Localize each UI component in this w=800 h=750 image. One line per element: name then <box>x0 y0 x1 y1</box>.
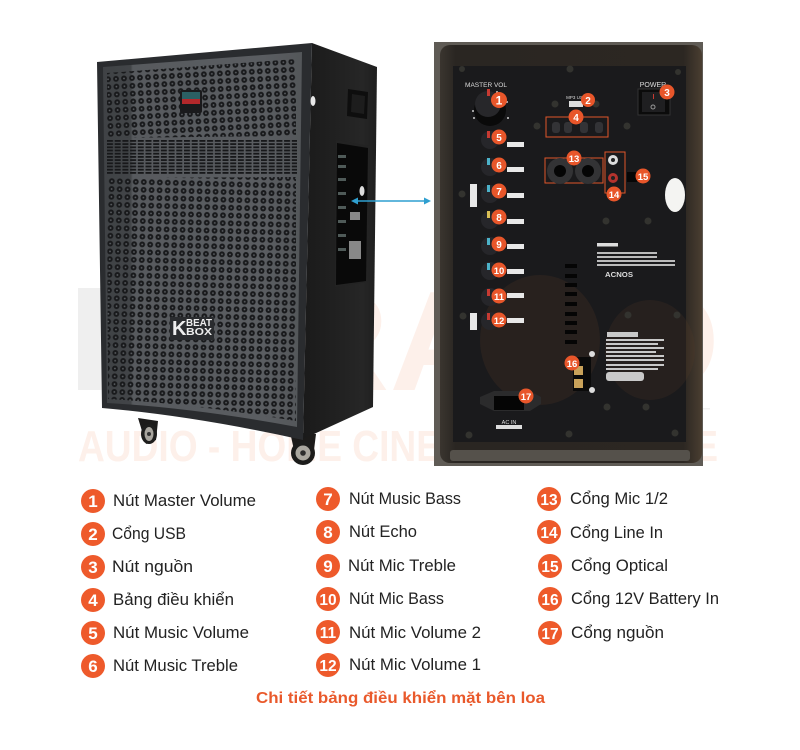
photo number markers: 17 <box>521 392 531 403</box>
side control panel <box>335 140 370 287</box>
model text <box>597 243 675 279</box>
item 17: 17 <box>541 626 559 643</box>
photo number markers: 4 <box>573 113 579 124</box>
vent slots <box>565 264 577 344</box>
power switch <box>638 82 670 115</box>
item 1: Nút Master Volume <box>113 491 256 510</box>
item 12: Nút Mic Volume 1 <box>349 655 481 674</box>
photo number markers: 12 <box>494 316 504 327</box>
item 5: Nút Music Volume <box>113 623 249 642</box>
item 8: Nút Echo <box>349 522 417 541</box>
usb port: MP3 USB <box>566 95 586 100</box>
item 10: 10 <box>319 592 337 609</box>
watermark: RADO <box>282 262 720 421</box>
master vol label: MASTER VOL <box>465 82 507 89</box>
item 3: 3 <box>88 558 98 577</box>
KBEAT BOX logo: K <box>172 318 187 340</box>
watermark tint <box>480 275 600 405</box>
photo number markers: 11 <box>494 292 505 303</box>
item 15: Cổng Optical <box>571 556 668 575</box>
top badge logo <box>180 90 202 113</box>
photo number markers: 7 <box>496 187 502 198</box>
small knobs <box>481 131 499 330</box>
usb port <box>566 95 586 107</box>
item 14: Cổng Line In <box>570 523 663 542</box>
power switch: POWER <box>640 82 666 89</box>
speaker photo <box>97 43 377 465</box>
item 11: Nút Mic Volume 2 <box>349 623 481 642</box>
item 12 <box>316 653 481 677</box>
item 6: Nút Music Treble <box>113 656 238 675</box>
item 17: Cổng nguồn <box>571 623 664 642</box>
item 9 <box>316 554 456 578</box>
photo number markers: 1 <box>496 94 503 108</box>
photo number markers: 9 <box>496 240 502 251</box>
media buttons with box <box>546 117 608 137</box>
item 16: Cổng 12V Battery In <box>571 589 719 608</box>
item 11: 11 <box>320 625 337 642</box>
item 10 <box>316 587 444 611</box>
cabinet side <box>303 43 377 439</box>
item 4 <box>81 588 234 612</box>
item 13: Cổng Mic 1/2 <box>570 489 668 508</box>
item 3 <box>81 555 193 579</box>
line in ports with box <box>605 152 625 193</box>
photo number markers: 16 <box>567 359 577 370</box>
master knob <box>472 89 509 126</box>
AC inlet <box>480 391 541 429</box>
item 8: 8 <box>323 523 333 542</box>
cabinet frame <box>440 45 702 463</box>
item 10: Nút Mic Bass <box>349 589 444 608</box>
item 14 <box>537 520 663 544</box>
left wheel <box>138 418 158 444</box>
item 7: 7 <box>323 490 333 509</box>
photo number markers: 15 <box>638 172 649 183</box>
warning text <box>606 332 664 381</box>
legend column 3 <box>537 487 719 645</box>
photo number markers: 10 <box>494 266 504 277</box>
knob labels <box>470 142 524 330</box>
side hole <box>310 96 316 106</box>
AC inlet: AC IN <box>502 420 516 426</box>
bottom edge highlight <box>450 450 690 461</box>
item 2: 2 <box>88 525 98 544</box>
item 17 <box>538 621 664 645</box>
item 7: Nút Music Bass <box>349 489 461 508</box>
legend column 1 <box>81 489 256 678</box>
item 12: 12 <box>319 658 337 675</box>
item 13 <box>537 487 668 511</box>
watermark <box>78 262 720 471</box>
battery terminal <box>573 351 595 393</box>
photo number markers <box>491 84 674 404</box>
item 6: 6 <box>88 657 98 676</box>
item 6 <box>81 654 238 678</box>
item 14: 14 <box>540 525 558 542</box>
control panel photo <box>434 42 703 466</box>
photo number markers: 5 <box>496 133 502 144</box>
photo number markers: 3 <box>664 88 670 99</box>
item 1: 1 <box>88 492 98 511</box>
item 15 <box>538 554 668 578</box>
KBEAT BOX logo: BEAT <box>186 318 212 329</box>
side handle <box>347 89 368 119</box>
optical port <box>627 172 637 182</box>
photo number markers: 8 <box>496 213 502 224</box>
legend column 2 <box>316 487 481 677</box>
item 8 <box>316 520 417 544</box>
item 11 <box>316 620 481 644</box>
item 13: 13 <box>540 492 558 509</box>
KBEAT BOX logo: BOX <box>186 327 212 338</box>
item 4: Bảng điều khiển <box>113 590 234 609</box>
photo number markers: 2 <box>585 96 591 107</box>
arrow <box>351 198 431 204</box>
item 2: Cổng USB <box>112 524 186 543</box>
item 16: 16 <box>541 592 559 609</box>
front grille panel <box>100 50 305 430</box>
item 5 <box>81 621 249 645</box>
KBEAT BOX logo <box>170 317 214 340</box>
photo number markers: 14 <box>609 190 620 201</box>
mic ports with box <box>545 158 603 184</box>
item 15: 15 <box>541 559 559 576</box>
item 3: Nút nguồn <box>112 557 193 576</box>
right wheel <box>290 432 316 465</box>
white hole <box>665 178 685 212</box>
item 9: Nút Mic Treble <box>348 556 456 575</box>
item 1 <box>81 489 256 513</box>
photo number markers: 6 <box>496 161 502 172</box>
item 16 <box>538 587 719 611</box>
photo backdrop <box>434 42 703 466</box>
caption: Chi tiết bảng điều khiển mặt bên loa <box>256 689 545 707</box>
photo number markers: 13 <box>569 154 579 165</box>
screws <box>458 66 681 438</box>
item 7 <box>316 487 461 511</box>
model text: ACNOS <box>605 272 633 279</box>
item 2 <box>81 522 186 546</box>
black plate <box>453 66 686 442</box>
front frame <box>97 43 312 440</box>
item 9: 9 <box>323 557 333 576</box>
item 4: 4 <box>88 591 98 610</box>
item 5: 5 <box>88 624 98 643</box>
